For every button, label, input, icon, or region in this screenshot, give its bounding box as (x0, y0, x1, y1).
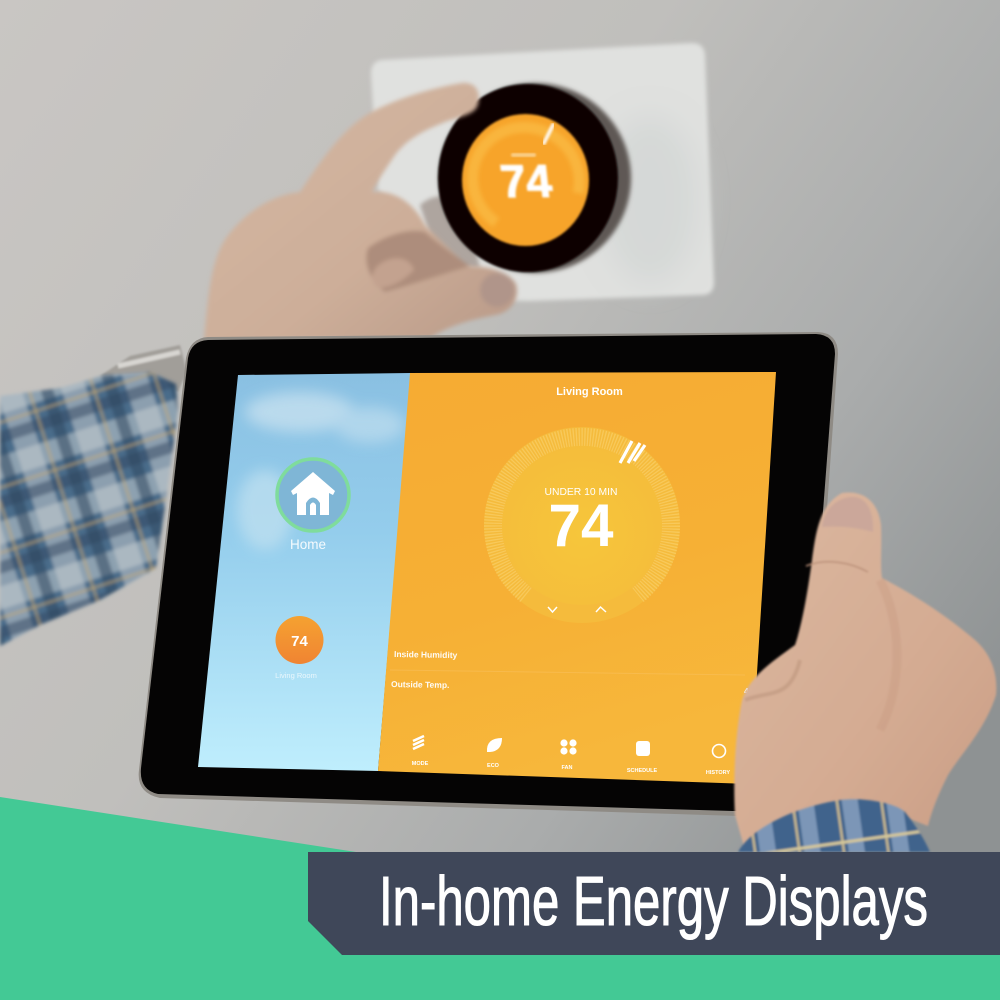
hand holding tablet (734, 492, 996, 850)
outside temperature label: Outside Temp. (391, 679, 450, 690)
room title: Living Room (556, 386, 623, 398)
thermostat orange screen (462, 114, 589, 246)
right shirt cuff (738, 799, 930, 852)
house glyph (291, 472, 335, 515)
toolbar (412, 736, 730, 776)
palm crease (745, 660, 800, 700)
history label: HISTORY (706, 770, 730, 776)
tablet screen orange panel (378, 372, 776, 784)
thumbnail (822, 497, 873, 532)
curled finger (366, 231, 470, 292)
dial set-point markers (620, 441, 645, 463)
home label: Home (290, 537, 326, 552)
hand turning thermostat (204, 83, 517, 340)
home ring (277, 459, 349, 531)
fan label: FAN (562, 765, 573, 771)
clouds (237, 392, 405, 550)
tablet silver edge (139, 332, 838, 818)
schedule icon (636, 741, 650, 756)
thermostat temperature: 74 (498, 155, 555, 207)
home icon (277, 459, 349, 531)
room temperature badge: 74 (291, 633, 308, 650)
outside temperature value: 4 (744, 686, 749, 696)
row divider (390, 670, 745, 675)
thumb nail (480, 273, 514, 307)
finger shadow on wall plate (420, 196, 480, 268)
palm shading (880, 580, 897, 730)
watch (100, 345, 187, 392)
room temperature badge (276, 616, 324, 664)
mode label: MODE (412, 761, 429, 767)
dial status label: UNDER 10 MIN (544, 486, 618, 498)
eco icon (487, 738, 502, 752)
knuckle crease (806, 562, 868, 572)
eco label: ECO (487, 763, 500, 769)
thermostat (438, 83, 631, 273)
thermostat silver ring (439, 83, 631, 273)
dial tick ring (493, 437, 671, 595)
tablet bezel (141, 334, 835, 813)
dial temperature: 74 (548, 492, 614, 559)
dial face (484, 427, 680, 623)
curled fingertip (372, 258, 414, 288)
tablet (139, 332, 838, 818)
badge label: Living Room (275, 671, 317, 680)
schedule label: SCHEDULE (627, 768, 657, 774)
temperature dial (484, 427, 680, 623)
thermostat small label (511, 153, 536, 157)
thermostat inner dial (452, 106, 600, 254)
title banner (308, 852, 1000, 955)
green corner shape (0, 797, 1000, 1000)
dial down arrow (548, 607, 557, 612)
thermostat indicator (544, 125, 553, 143)
dial up arrow (596, 607, 606, 612)
fan icon (560, 739, 577, 755)
left shirt sleeve (0, 372, 178, 646)
tablet screen left blue panel (198, 373, 411, 771)
humidity label: Inside Humidity (394, 649, 458, 660)
wall plate (371, 43, 714, 301)
mode icon (413, 736, 424, 749)
history icon (712, 744, 726, 758)
thermostat black bezel (438, 84, 618, 272)
